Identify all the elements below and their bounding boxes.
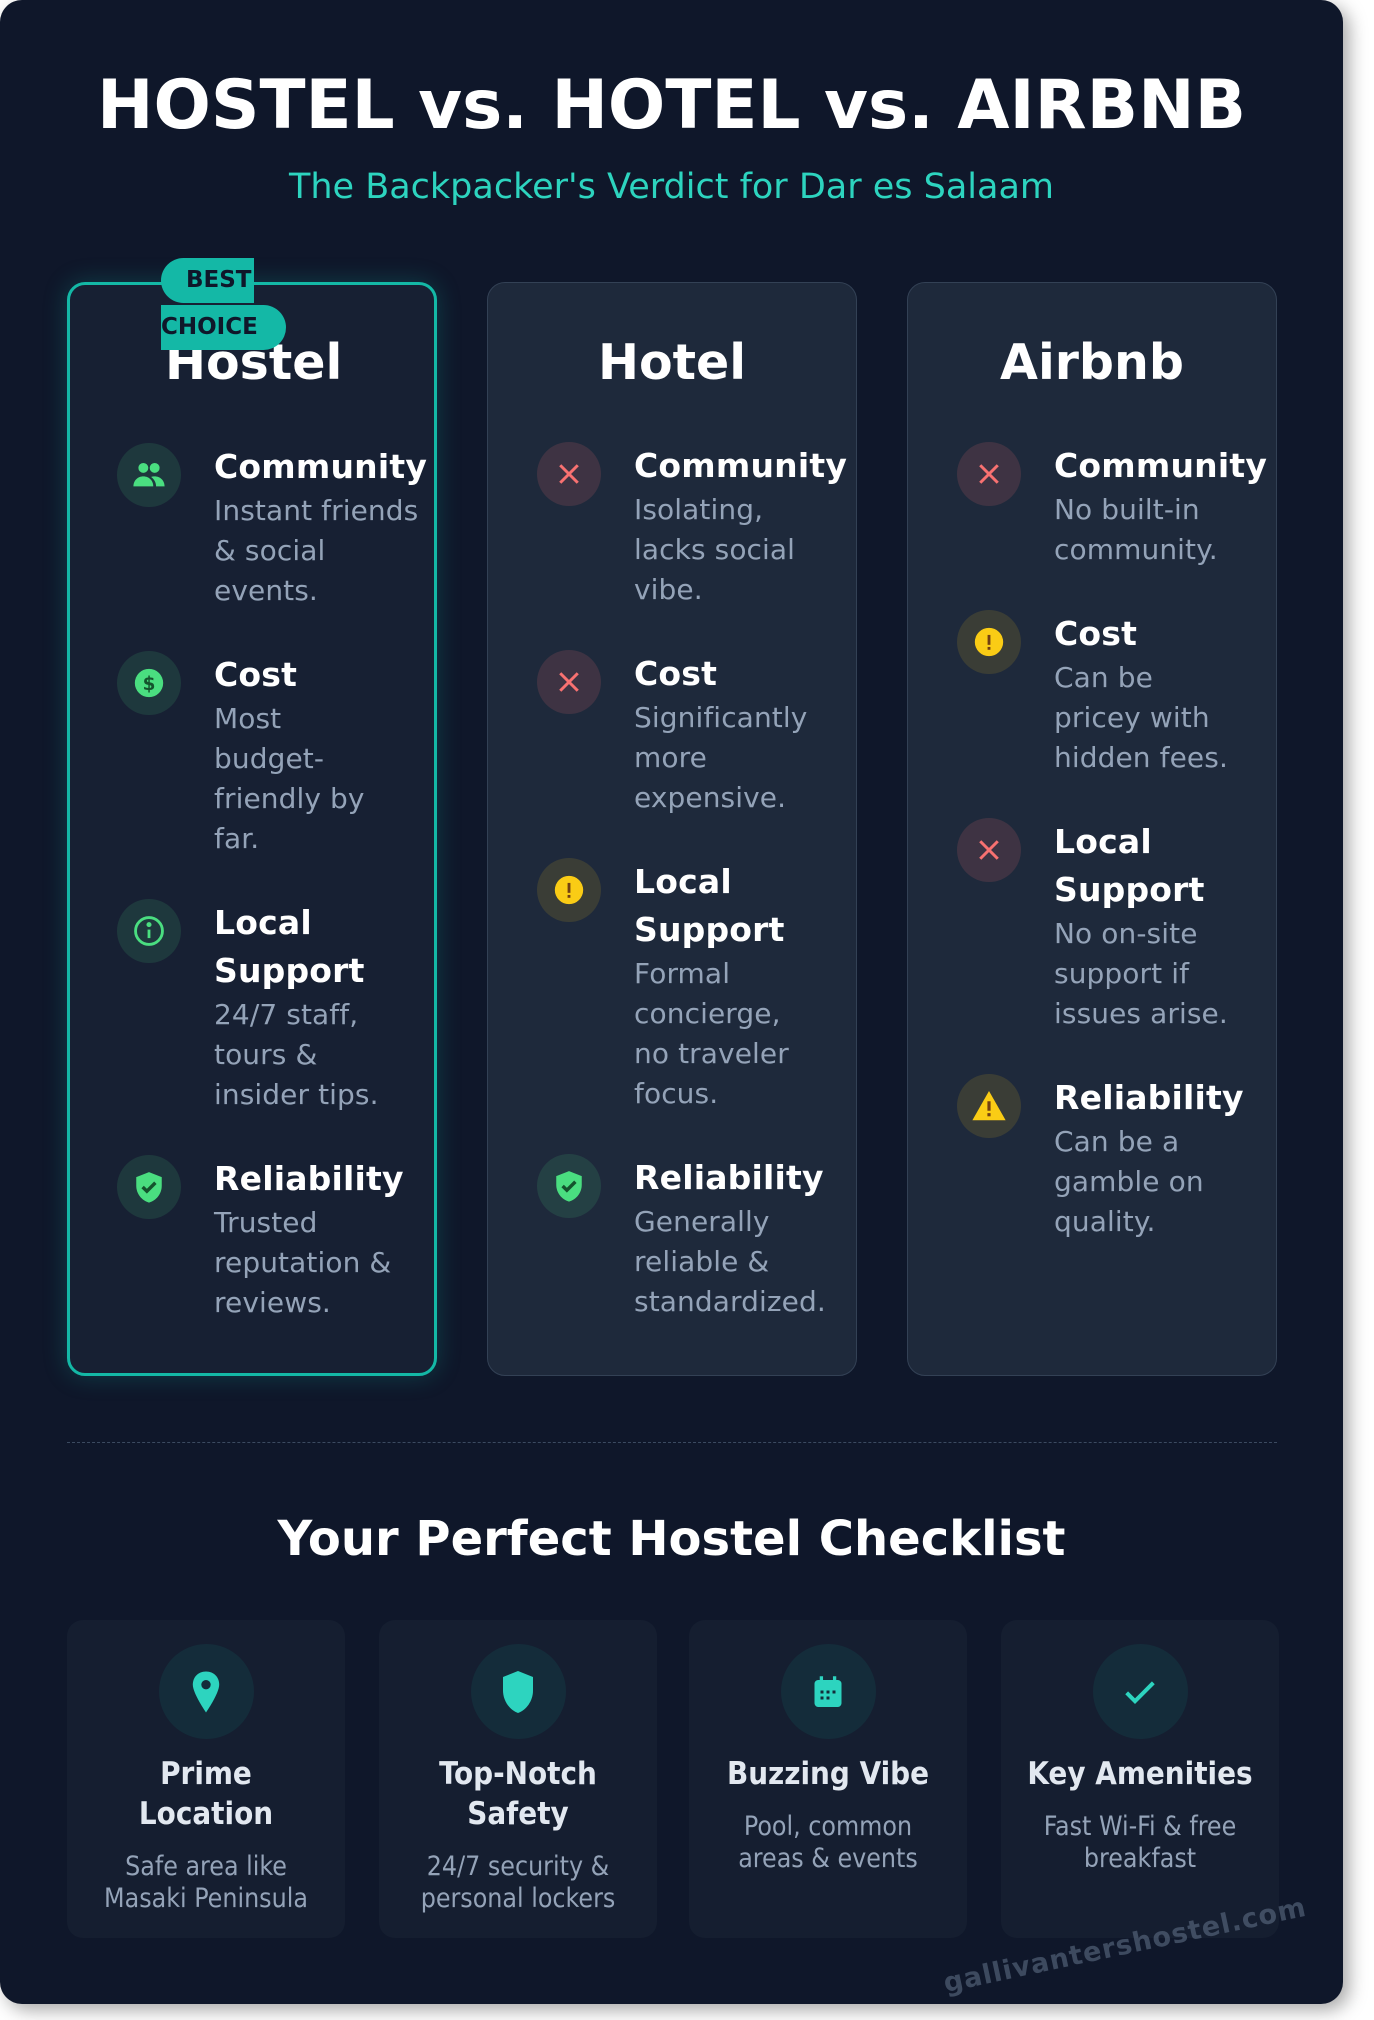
- checklist card: prime location: [67, 1620, 345, 1938]
- item: reliability: Reliability: [634, 1158, 824, 1197]
- item: local support: concierge,: [634, 997, 781, 1030]
- checklist card: amenities: [1001, 1620, 1279, 1938]
- item: cost: budget-: [214, 742, 324, 775]
- badge: best choice: BEST: [186, 267, 252, 293]
- checklist card: safety: Safety: [467, 1796, 569, 1832]
- panel: hotel: [487, 282, 857, 1376]
- item: reliability: Can be a: [1054, 1125, 1179, 1158]
- item: local support: Formal: [634, 957, 730, 990]
- checklist card: vibe: areas & events: [738, 1843, 918, 1874]
- item: cost: Cost: [214, 655, 297, 694]
- item: reliability: Reliability: [214, 1159, 404, 1198]
- item: reliability: standardized.: [634, 1285, 826, 1318]
- item: cost: Significantly: [634, 701, 807, 734]
- item list: [537, 442, 847, 1318]
- checklist card: prime location: Safe area like: [125, 1851, 287, 1882]
- item: community: Community: [214, 447, 427, 486]
- checklist card: prime location: Prime: [160, 1756, 252, 1792]
- item: community: Instant friends: [214, 494, 418, 527]
- item: local support: Support: [1054, 870, 1205, 909]
- item: cost: $: [143, 674, 155, 695]
- item: reliability: reliable &: [634, 1245, 769, 1278]
- item list: [957, 442, 1267, 1238]
- item: community: No built-in: [1054, 493, 1200, 526]
- item: community: lacks social: [634, 533, 795, 566]
- panel: airbnb: [907, 282, 1277, 1376]
- item: reliability: [537, 1154, 826, 1318]
- item: community: & social: [214, 534, 325, 567]
- item: community: Community: [1054, 446, 1267, 485]
- checklist card: vibe: Pool, common: [744, 1811, 912, 1842]
- checklist card: amenities: Key Amenities: [1027, 1756, 1253, 1792]
- item: cost: hidden fees.: [1054, 741, 1228, 774]
- checklist card: safety: Top-Notch: [439, 1756, 597, 1792]
- item: cost: expensive.: [634, 781, 786, 814]
- item: local support: No on-site: [1054, 917, 1198, 950]
- item: local support: 24/7 staff,: [214, 998, 358, 1031]
- item: reliability: Generally: [634, 1205, 770, 1238]
- item: community: vibe.: [634, 573, 703, 606]
- badge: best choice: CHOICE: [161, 314, 258, 340]
- item: reliability: quality.: [1054, 1205, 1156, 1238]
- item: reliability: reviews.: [214, 1286, 331, 1319]
- item: local support: support if: [1054, 957, 1189, 990]
- checklist card: vibe: [689, 1620, 967, 1938]
- item: local support: tours &: [214, 1038, 317, 1071]
- item: community: Community: [634, 446, 847, 485]
- item: reliability: [957, 1074, 1244, 1238]
- checklist card: safety: personal lockers: [421, 1883, 615, 1914]
- subtitle: The Backpacker's Verdict for Dar es Salaam: [289, 167, 1054, 207]
- item: cost: [537, 650, 807, 814]
- item: reliability: [117, 1155, 404, 1319]
- item: cost: [117, 651, 365, 855]
- item: cost: Cost: [1054, 614, 1137, 653]
- item: cost: Most: [214, 702, 281, 735]
- item: local support: Support: [214, 951, 365, 990]
- item: community: [537, 442, 847, 606]
- panel: hostel: [67, 282, 437, 1376]
- item: reliability: Trusted: [214, 1206, 318, 1239]
- watermark: gallivantershostel.com: [941, 1892, 1309, 1999]
- item: local support: [957, 818, 1228, 1030]
- checklist heading: Your Perfect Hostel Checklist: [278, 1511, 1065, 1567]
- checklist card: amenities: Fast Wi-Fi & free: [1044, 1811, 1236, 1842]
- item: reliability: gamble on: [1054, 1165, 1204, 1198]
- badge: best choice: [161, 258, 286, 350]
- item: cost: pricey with: [1054, 701, 1210, 734]
- item: local support: issues arise.: [1054, 997, 1228, 1030]
- checklist card: prime location: Location: [139, 1796, 273, 1832]
- item: local support: focus.: [634, 1077, 718, 1110]
- item: cost: far.: [214, 822, 259, 855]
- item: local support: [537, 858, 789, 1110]
- checklist card: amenities: breakfast: [1084, 1843, 1196, 1874]
- icon: shield: [470, 1644, 566, 1739]
- item: local support: [117, 899, 379, 1111]
- item: local support: Support: [634, 910, 785, 949]
- checklist card: prime location: Masaki Peninsula: [104, 1883, 308, 1914]
- item: local support: Local: [214, 903, 312, 942]
- item: cost: Cost: [634, 654, 717, 693]
- icon: calendar: [780, 1644, 876, 1739]
- item: reliability: reputation &: [214, 1246, 391, 1279]
- icon: check: [1092, 1644, 1188, 1739]
- item: cost: Can be: [1054, 661, 1153, 694]
- item: community: Isolating,: [634, 493, 763, 526]
- checklist card: safety: 24/7 security &: [427, 1851, 609, 1882]
- item: community: [957, 442, 1267, 566]
- item: cost: more: [634, 741, 707, 774]
- checklist card: safety: [379, 1620, 657, 1938]
- item: community: community.: [1054, 533, 1218, 566]
- title: HOSTEL vs. HOTEL vs. AIRBNB: [97, 65, 1246, 144]
- column heading: Hostel: Hostel: [165, 334, 342, 391]
- item: local support: Local: [1054, 822, 1152, 861]
- item: local support: insider tips.: [214, 1078, 379, 1111]
- column heading: Airbnb: Airbnb: [1000, 334, 1184, 391]
- item: community: [117, 443, 427, 607]
- item: cost: friendly by: [214, 782, 365, 815]
- icon: pin: [158, 1644, 254, 1739]
- item: community: events.: [214, 574, 318, 607]
- item list: [117, 443, 427, 1319]
- item: local support: no traveler: [634, 1037, 789, 1070]
- checklist card: vibe: Buzzing Vibe: [727, 1756, 929, 1792]
- item: cost: [957, 610, 1228, 774]
- item: local support: Local: [634, 862, 732, 901]
- item: reliability: Reliability: [1054, 1078, 1244, 1117]
- column heading: Hotel: Hotel: [598, 334, 746, 391]
